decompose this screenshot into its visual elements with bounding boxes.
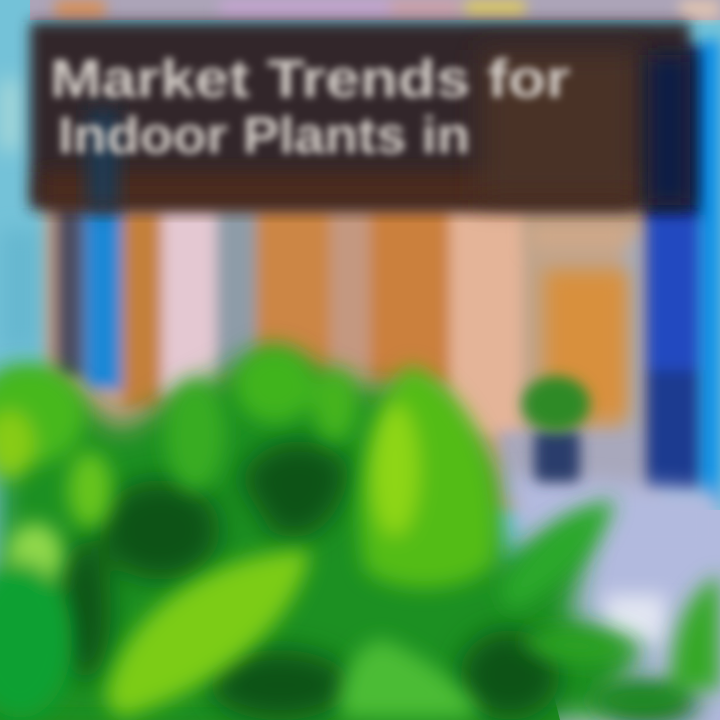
background: blurred sky and wall [0, 0, 720, 348]
doorway with orange glow [530, 222, 630, 420]
title text [50, 49, 570, 165]
icon: pot foliage [522, 376, 590, 432]
top strip of colour above the panel [55, 0, 720, 18]
foreground foliage [0, 347, 720, 720]
title text: Market Trends for [50, 49, 570, 109]
title panel [30, 22, 690, 210]
potted plant by the door [522, 376, 590, 482]
building facade columns [45, 190, 660, 510]
bright leaves [0, 347, 720, 718]
pale ground at lower right [510, 475, 720, 720]
solid foliage base reaching the bottom edge [0, 694, 560, 720]
foliage body [0, 350, 640, 720]
dark shadows between leaves [59, 441, 700, 720]
icon: plant pot [534, 430, 580, 482]
title text: Indoor Plants in [58, 107, 470, 165]
right-hand blue pillars [644, 40, 720, 505]
